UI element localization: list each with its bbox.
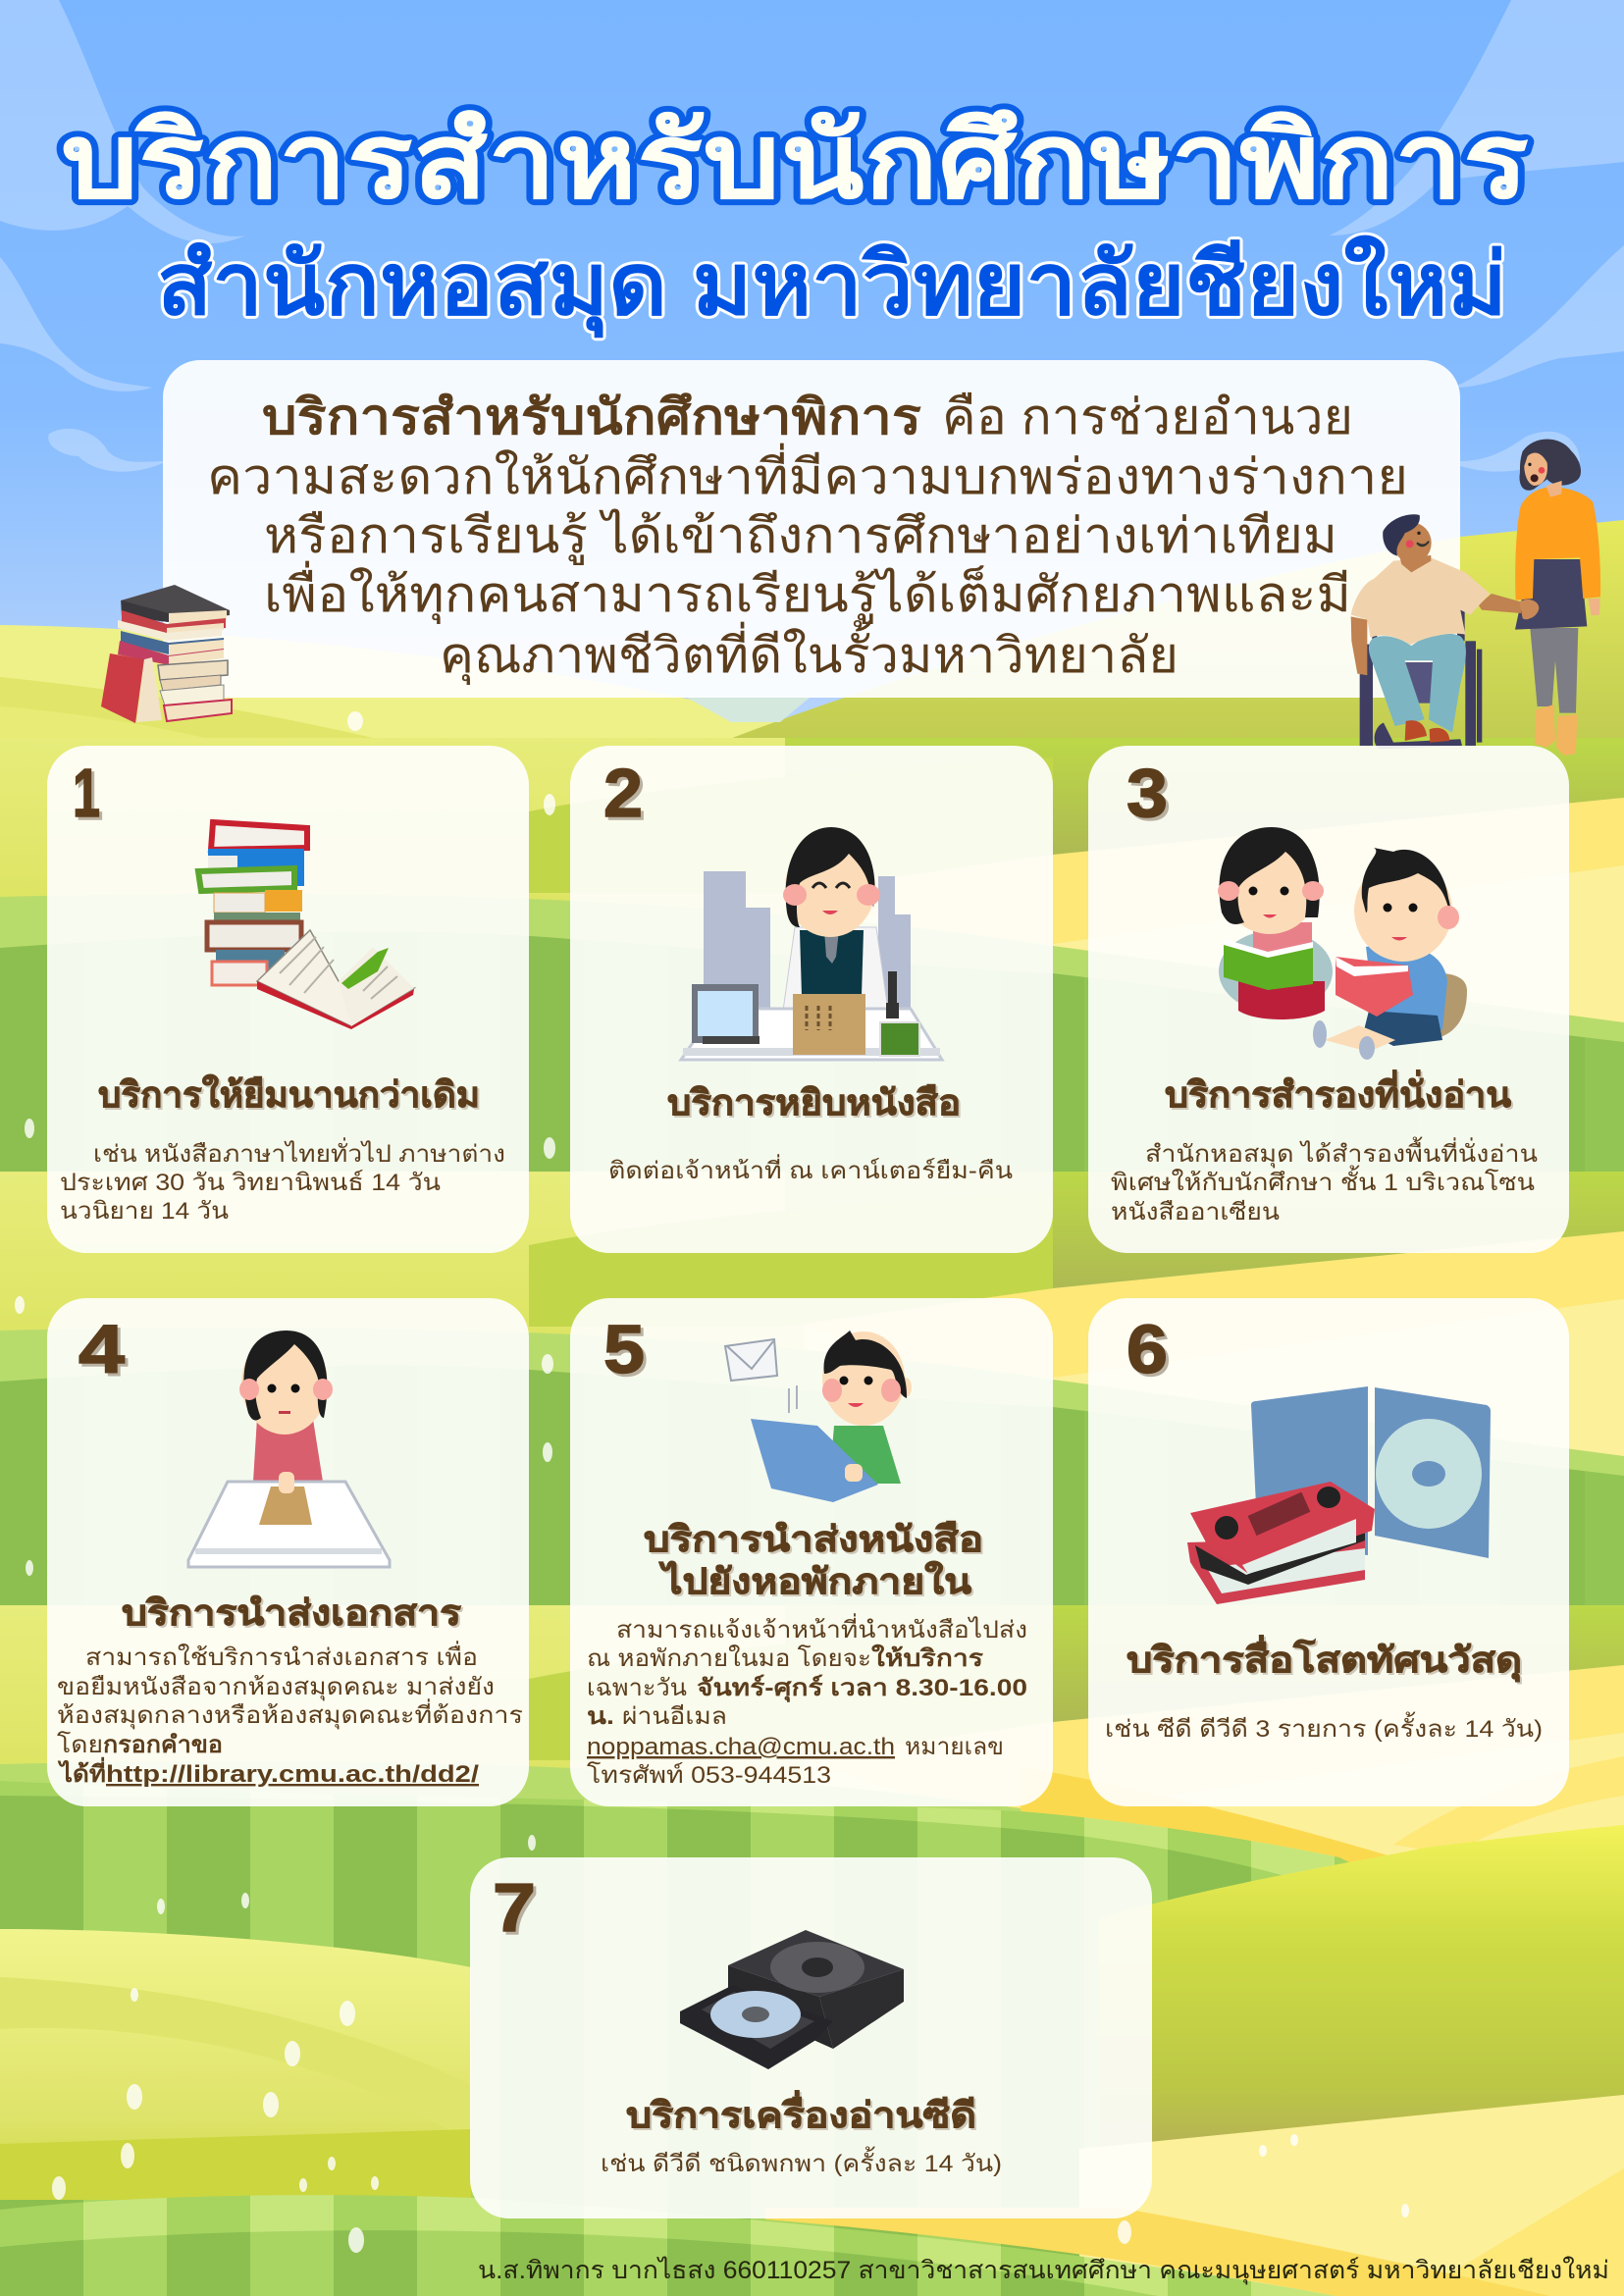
panel: intro — [163, 360, 1460, 698]
card 4 text: สามารถใช้บริการนำส่งเอกสาร เพื่อ — [85, 1641, 478, 1671]
card 2 heading: บริการหยิบหนังสือ — [667, 1082, 961, 1122]
card 5 text: โทรศัพท์ 053-944513 — [587, 1761, 831, 1789]
man — [1351, 514, 1539, 743]
icon: stack of books — [101, 585, 232, 723]
card 3 heading: บริการสำรองที่นั่งอ่าน — [1165, 1070, 1511, 1115]
card 5 text: สามารถแจ้งเจ้าหน้าที่นำหนังสือไปส่ง — [616, 1613, 1027, 1644]
card 4 text: ขอยืมหนังสือจากห้องสมุดคณะ มาส่งยัง — [57, 1674, 495, 1701]
card 1 text: เช่น หนังสือภาษาไทยทั่วไป ภาษาต่าง — [93, 1137, 505, 1168]
intro text: เพื่อให้ทุกคนสามารถเรียนรู้ได้เต็มศักยภาพและมี — [264, 561, 1351, 624]
card 6 text: เช่น ซีดี ดีวีดี 3 รายการ (ครั้งละ 14 วัน) — [1105, 1711, 1543, 1743]
icon: CD drive — [680, 1930, 904, 2069]
card 3 — [1088, 746, 1569, 1253]
number 1: 1 — [73, 755, 100, 831]
card 5 text: น. — [587, 1703, 614, 1730]
card 1 heading: บริการให้ยืมนานกว่าเดิม — [98, 1073, 480, 1115]
icon: books with open book — [198, 822, 414, 1029]
card 4 — [47, 1298, 529, 1806]
title line 1: บริการสำหรับนักศึกษาพิการ — [61, 102, 1529, 220]
card 5 heading — [644, 1519, 983, 1601]
card 5 text — [587, 1613, 1027, 1789]
card 4 heading: บริการนำส่งเอกสาร — [122, 1592, 462, 1633]
card 5 — [570, 1298, 1053, 1806]
icon: man in wheelchair and woman — [1351, 439, 1600, 756]
card 1 text — [60, 1137, 505, 1225]
card 5 text: จันทร์-ศุกร์ เวลา 8.30-16.00 — [697, 1674, 1027, 1703]
card 3 text — [1111, 1136, 1538, 1226]
icon: DVD case and video tapes — [1187, 1386, 1491, 1604]
card 4 text: กรอกคำขอ — [103, 1732, 223, 1758]
far hills — [0, 625, 785, 785]
card 5 text: noppamas.cha@cmu.ac.th — [587, 1734, 895, 1760]
card 3 text: หนังสืออาเซียน — [1111, 1199, 1280, 1226]
icon: person emailing on laptop — [725, 1331, 912, 1502]
intro text: ความสะดวกให้นักศึกษาที่มีความบกพร่องทางร่างกาย — [207, 444, 1408, 504]
card 5 heading: บริการนำส่งหนังสือ — [644, 1519, 983, 1559]
card 5 text: ณ หอพักภายในมอ โดยจะ — [587, 1644, 871, 1672]
title line 2: สำนักหอสมุด มหาวิทยาลัยชียงใหม่ — [157, 235, 1507, 339]
card 1 text: ประเทศ 30 วัน วิทยานิพนธ์ 14 วัน — [60, 1169, 441, 1196]
number 6: 6 — [1126, 1311, 1168, 1387]
icon: staff at counter — [681, 827, 942, 1060]
card 4 text: ห้องสมุดกลางหรือห้องสมุดคณะที่ต้องการ — [57, 1698, 523, 1730]
card 2 text: ติดต่อเจ้าหน้าที่ ณ เคาน์เตอร์ยืม-คืน — [608, 1154, 1013, 1184]
card 4 text: http://library.cmu.ac.th/dd2/ — [106, 1761, 479, 1788]
card 2 — [570, 746, 1053, 1253]
woman — [1515, 439, 1600, 756]
intro text — [207, 390, 1408, 685]
intro text: หรือการเรียนรู้ ได้เข้าถึงการศึกษาอย่างเท่าเทียม — [264, 508, 1337, 565]
card 4 text: โดย — [57, 1731, 103, 1758]
card 1 text: นวนิยาย 14 วัน — [60, 1198, 229, 1225]
card 5 text: เฉพาะวัน — [587, 1675, 687, 1701]
card 5 text: ให้บริการ — [871, 1644, 983, 1672]
number 3: 3 — [1126, 755, 1168, 831]
card 1 — [47, 746, 529, 1253]
card 7 heading: บริการเครื่องอ่านซีดี — [626, 2090, 976, 2135]
title — [61, 102, 1529, 339]
card 5 text: หมายเลข — [905, 1734, 1004, 1760]
wheelchair — [1360, 610, 1482, 749]
footer credit: น.ส.ทิพากร บากไธสง 660110257 สาขาวิชาสารสนเทศศึกษา คณะมนุษยศาสตร์ มหาวิทยาลัยเชียงใหม่ — [478, 2256, 1609, 2285]
number 2: 2 — [603, 755, 643, 831]
icon: children reading — [1218, 827, 1467, 1060]
card 6 — [1088, 1298, 1569, 1806]
card 6 heading: บริการสื่อโสตทัศนวัสดุ — [1126, 1635, 1522, 1683]
intro text: คือ การช่วยอำนวย — [942, 390, 1353, 444]
card 7 — [470, 1857, 1152, 2218]
card 5 text: ผ่านอีเมล — [622, 1703, 727, 1730]
card 4 text: ได้ที่ — [57, 1756, 106, 1788]
lower scene — [1021, 2031, 1624, 2296]
card 3 text: สำนักหอสมุด ได้สำรองพื้นที่นั่งอ่าน — [1145, 1136, 1538, 1169]
intro text: บริการสำหรับนักศึกษาพิการ — [262, 390, 921, 444]
number 7: 7 — [493, 1869, 536, 1946]
intro text: คุณภาพชีวิตที่ดีในรั้วมหาวิทยาลัย — [440, 620, 1179, 685]
number 4: 4 — [79, 1311, 125, 1387]
card 3 text: พิเศษให้กับนักศึกษา ชั้น 1 บริเวณโซน — [1111, 1165, 1535, 1196]
card 7 text: เช่น ดีวีดี ชนิดพกพา (ครั้งละ 14 วัน) — [601, 2146, 1002, 2177]
icon: staff with document at counter — [188, 1331, 390, 1567]
number 5: 5 — [603, 1311, 645, 1387]
card 4 text — [57, 1641, 523, 1788]
card 5 heading: ไปยังหอพักภายใน — [657, 1560, 971, 1601]
